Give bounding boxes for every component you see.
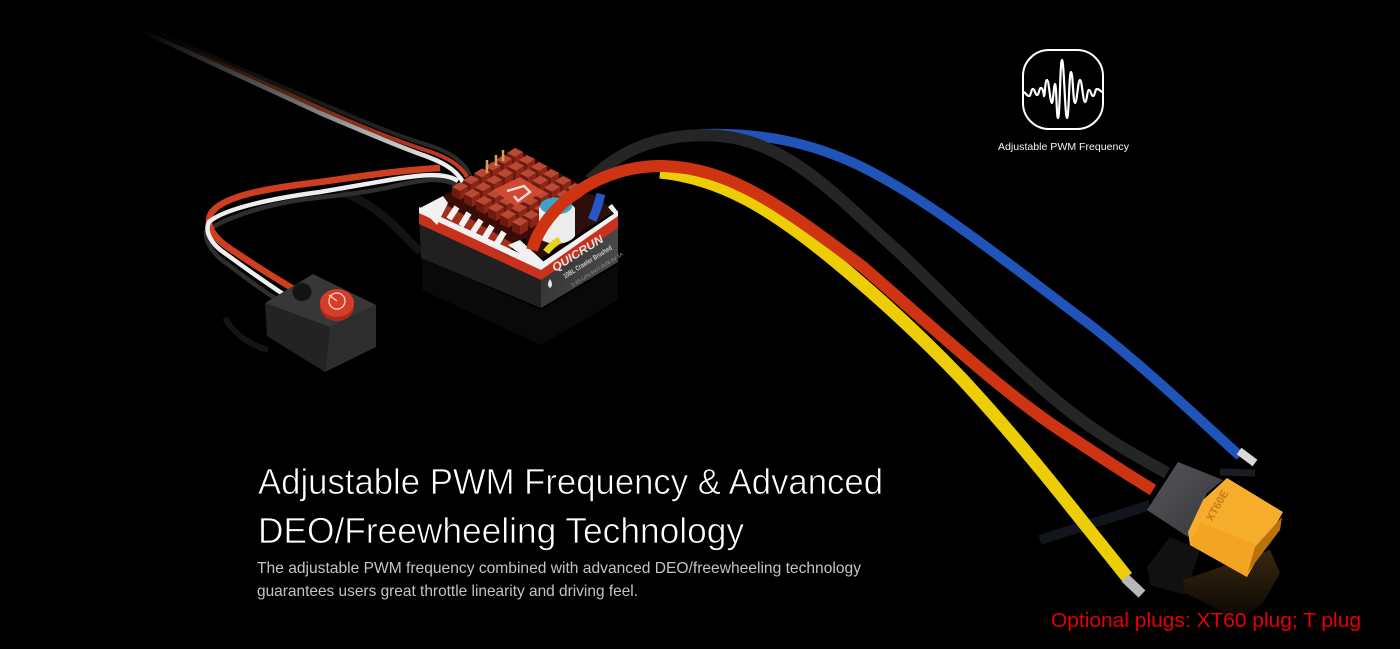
bare blue tip [1239, 451, 1255, 463]
switch right face [325, 305, 376, 372]
ESC label: 2-3S LiPo 6V/7.4V/8.4V 3A [570, 251, 625, 289]
logo plate [493, 177, 545, 206]
blue wire [700, 134, 1255, 463]
XT60 plug [1147, 462, 1283, 620]
ESC label: 10BL Crawler Brushed [562, 245, 614, 280]
red wire [532, 166, 1153, 490]
icon rounded square [1023, 50, 1103, 129]
PWM icon [998, 50, 1130, 153]
cable shadows [225, 192, 1150, 540]
black wire [590, 135, 1167, 473]
bare yellow tip [1125, 578, 1142, 594]
switch module [265, 274, 376, 372]
yellow internal wire [546, 240, 560, 252]
icon caption: Adjustable PWM Frequency [998, 141, 1130, 153]
heatsink fins [452, 148, 583, 235]
heading: Adjustable PWM Frequency & Advanced [258, 461, 883, 502]
description: The adjustable PWM frequency combined with advanced DEO/freewheeling technology [257, 560, 861, 577]
pins [487, 150, 503, 173]
heading [258, 461, 883, 551]
blue tip shadow [1220, 472, 1255, 473]
white plate trim [419, 196, 618, 270]
optional plugs note: Optional plugs: XT60 plug; T plug [1051, 609, 1361, 632]
sensor cable to upper left [140, 30, 470, 182]
black left face [419, 215, 541, 308]
capacitor top [540, 198, 572, 214]
blue internal wire [592, 194, 601, 220]
cavity [520, 188, 613, 262]
heatsink base [438, 148, 590, 247]
waveform [1023, 60, 1103, 118]
logo mark [507, 186, 530, 201]
switch left face [265, 303, 330, 372]
ESC [419, 148, 625, 345]
description: guarantees users great throttle linearity and driving feel. [257, 583, 638, 600]
red plate edge [419, 210, 618, 280]
heatsink front edge [432, 200, 512, 258]
plug reflection [1147, 537, 1280, 620]
plug body [1188, 478, 1283, 577]
black button [292, 283, 312, 301]
plug side face [1190, 522, 1257, 577]
power symbol [329, 293, 345, 309]
reflection below ESC [422, 258, 618, 345]
plug opening [1248, 517, 1282, 572]
red power button [320, 289, 354, 321]
yellow wire [660, 172, 1142, 594]
grey right face [541, 222, 618, 308]
switch cable [206, 168, 460, 300]
droplet icon [548, 279, 552, 288]
ESC label: QUICRUN [550, 233, 606, 275]
description [257, 560, 861, 600]
ESC label [550, 229, 625, 292]
capacitor [539, 200, 575, 244]
white fin highlights [449, 207, 504, 245]
plug housing [1147, 462, 1223, 537]
plug marking: XT60E [1204, 488, 1231, 524]
heading: DEO/Freewheeling Technology [258, 510, 744, 551]
switch top face [265, 274, 376, 327]
